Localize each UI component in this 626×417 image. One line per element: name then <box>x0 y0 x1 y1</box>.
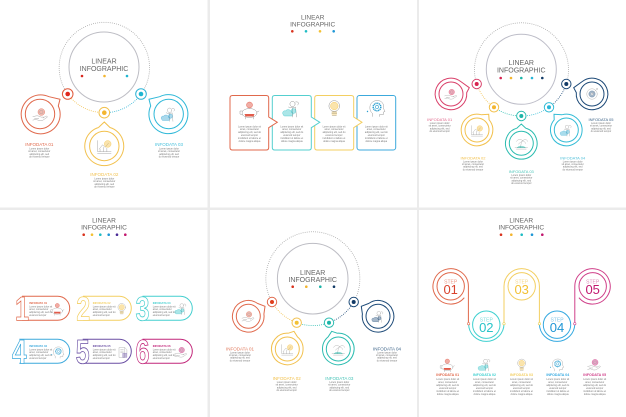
label 2: sit amet, consectetur <box>276 384 298 387</box>
label 2: adipiscing elit, sed <box>277 386 297 389</box>
pill 5 <box>76 333 131 371</box>
title: INFOGRAPHIC <box>80 66 128 73</box>
box 4: incididunt ut labore et <box>365 137 388 140</box>
label 1 <box>427 117 453 133</box>
pill 4: amet, consectetur <box>29 351 49 354</box>
column 2: incididunt ut labore et <box>473 390 496 393</box>
step 1 <box>433 269 468 324</box>
step 3: 03 <box>514 282 529 297</box>
pill 4: INFODATA 04 <box>29 344 48 348</box>
label 3: do eiusmod tempor <box>329 389 350 392</box>
box 4 <box>357 96 396 150</box>
label 3 <box>155 142 184 159</box>
column 4: adipiscing elit, sed do <box>546 384 570 387</box>
central circle <box>277 243 348 314</box>
column 1: eiusmod tempor <box>439 387 456 390</box>
box 3: incididunt ut labore et <box>323 137 346 140</box>
pill 5: amet, consectetur <box>93 351 112 354</box>
panel: four arrow boxes <box>210 0 417 208</box>
column 2 <box>473 359 497 396</box>
dotted connectors <box>272 302 354 326</box>
box 1: adipiscing elit, sed do <box>238 131 262 134</box>
label 5: adipiscing elit, sed <box>591 127 611 130</box>
title: LINEAR <box>92 218 116 225</box>
column 1 <box>436 359 460 396</box>
column 1: INFODATA 01 <box>436 373 459 377</box>
node 4 <box>349 297 358 307</box>
step 2 <box>469 311 504 341</box>
column 5: amet, consectetur <box>585 381 604 384</box>
label 3: Lorem ipsum dolor <box>159 147 179 150</box>
box 2: dolore magna aliqua <box>281 140 303 143</box>
box 4: eiusmod tempor <box>368 134 385 137</box>
label 1: Lorem ipsum dolor <box>430 122 450 125</box>
label 2 <box>273 376 301 392</box>
label 2: INFODATA 02 <box>461 155 486 160</box>
dotted ring <box>59 22 150 94</box>
step 2: 02 <box>479 320 494 335</box>
label 4 <box>373 346 402 362</box>
title colour dots <box>500 233 544 236</box>
label 1: do eiusmod tempor <box>230 359 250 362</box>
pill 2: 2 <box>76 290 90 328</box>
label 5: Lorem ipsum dolor <box>591 122 611 125</box>
node 5 <box>562 79 571 89</box>
title: INFOGRAPHIC <box>288 277 337 284</box>
label 2: Lorem ipsum dolor <box>463 160 483 163</box>
label 2: sit amet, consectetur <box>93 180 116 183</box>
label 2 <box>90 172 119 189</box>
label 1: sit amet, consectetur <box>28 150 51 153</box>
pill 1: 1 <box>15 290 29 328</box>
column 5: dolore magna aliqua <box>584 393 606 396</box>
column 4: INFODATA 04 <box>546 373 569 377</box>
node 3 <box>324 318 334 327</box>
label 2: Lorem ipsum dolor <box>94 177 114 180</box>
label 4: Lorem ipsum dolor <box>563 160 583 163</box>
pill 1 <box>15 290 70 328</box>
callout 2 <box>85 122 124 166</box>
pill 2: amet, consectetur <box>93 308 112 311</box>
box 2: incididunt ut labore et <box>280 137 303 140</box>
label 1: INFODATA 01 <box>226 346 255 351</box>
pill 4 <box>12 333 70 371</box>
label 2: sit amet, consectetur <box>462 163 484 166</box>
callout 3 <box>323 331 354 365</box>
title: LINEAR <box>301 14 324 21</box>
step 3: STEP <box>515 279 529 285</box>
dotted ring <box>474 23 568 84</box>
label 3: sit amet, consectetur <box>158 150 180 153</box>
box 3: amet, consectetur <box>324 128 344 131</box>
column 1: dolore magna aliqua <box>437 393 459 396</box>
node 2 <box>99 107 110 118</box>
pill 2: INFODATA 02 <box>93 301 111 305</box>
pill 1: adipiscing elit, sed do <box>29 311 53 314</box>
label 2: do eiusmod tempor <box>276 389 297 392</box>
callout 3 <box>149 95 188 134</box>
title: LINEAR <box>300 270 325 277</box>
label 2: adipiscing elit, sed <box>95 183 115 186</box>
panel: four-step circular infographic <box>210 210 417 417</box>
label 4: INFODATA 04 <box>560 155 586 160</box>
column 5: Lorem ipsum dolor sit <box>583 378 606 381</box>
box 2 <box>272 96 320 150</box>
step 1: 01 <box>443 282 458 297</box>
pill 2: Lorem ipsum dolor sit <box>93 305 116 308</box>
title: INFOGRAPHIC <box>290 21 336 28</box>
pill 1: amet, consectetur <box>29 308 49 311</box>
box 2: Lorem ipsum dolor sit <box>280 125 303 128</box>
pill 4: 4 <box>12 333 27 371</box>
label 2: INFODATA 02 <box>273 376 301 381</box>
label 1: sit amet, consectetur <box>229 354 251 357</box>
panel: five-step circular infographic <box>419 0 626 208</box>
box 1: incididunt ut labore et <box>238 137 261 140</box>
central circle <box>69 32 139 102</box>
label 1: do eiusmod tempor <box>29 156 50 159</box>
column 2: adipiscing elit, sed do <box>473 384 497 387</box>
column 3: adipiscing elit, sed do <box>510 384 534 387</box>
column 3: amet, consectetur <box>512 381 531 384</box>
label 1: Lorem ipsum dolor <box>230 351 250 354</box>
label 3 <box>325 376 354 392</box>
title: LINEAR <box>91 58 117 66</box>
label 3: do eiusmod tempor <box>159 156 179 159</box>
callout 3 <box>505 124 537 159</box>
dotted connectors <box>68 94 141 113</box>
box 1: eiusmod tempor <box>241 134 258 137</box>
column 2: dolore magna aliqua <box>474 393 496 396</box>
pill 3: adipiscing elit, sed do <box>153 311 176 314</box>
box 1 <box>230 96 277 150</box>
label 3: INFODATA 03 <box>325 376 354 381</box>
column 4: incididunt ut labore et <box>546 390 569 393</box>
step 5: STEP <box>586 279 600 285</box>
column 1: adipiscing elit, sed do <box>436 384 460 387</box>
step 5: 05 <box>585 282 600 297</box>
box 1: dolore magna aliqua <box>239 140 261 143</box>
column 3 <box>510 359 534 396</box>
label 3: INFODATA 03 <box>509 169 535 174</box>
pill 6: INFODATA 06 <box>153 344 171 348</box>
dotted connectors <box>477 84 566 116</box>
title: INFOGRAPHIC <box>81 225 127 232</box>
callout 4 <box>551 114 582 146</box>
label 2: INFODATA 02 <box>90 172 119 177</box>
label 1 <box>25 142 54 159</box>
title colour dots <box>81 75 128 77</box>
label 4: do eiusmod tempor <box>562 168 583 171</box>
label 5: sit amet, consectetur <box>590 125 612 128</box>
label 3: Lorem ipsum dolor <box>329 381 349 384</box>
label 1: do eiusmod tempor <box>429 130 450 133</box>
label 3: adipiscing elit, sed <box>330 386 350 389</box>
column 4: dolore magna aliqua <box>547 393 569 396</box>
pill 6: Lorem ipsum dolor sit <box>153 348 176 351</box>
box 2: amet, consectetur <box>282 128 301 131</box>
pill 4: adipiscing elit, sed do <box>29 354 53 357</box>
pill 3: amet, consectetur <box>153 308 172 311</box>
callout 2 <box>461 114 493 146</box>
column 5: INFODATA 05 <box>583 373 606 377</box>
title: INFOGRAPHIC <box>497 68 546 74</box>
pill 1: Lorem ipsum dolor sit <box>29 305 52 308</box>
column 3: eiusmod tempor <box>513 387 530 390</box>
column 3: incididunt ut labore et <box>510 390 533 393</box>
step 4: STEP <box>550 317 564 323</box>
pill 2: adipiscing elit, sed do <box>93 311 116 314</box>
label 4: Lorem ipsum dolor <box>377 351 397 354</box>
label 2 <box>461 155 486 171</box>
pill 5: 5 <box>76 333 90 371</box>
node 1 <box>267 297 277 307</box>
node 1 <box>472 79 481 89</box>
label 5: INFODATA 05 <box>589 117 614 122</box>
label 2: adipiscing elit, sed <box>463 166 483 169</box>
label 3: INFODATA 03 <box>155 142 184 147</box>
box 2: eiusmod tempor <box>283 134 301 137</box>
dotted ring <box>266 232 360 302</box>
column 2: Lorem ipsum dolor sit <box>473 378 496 381</box>
label 5: do eiusmod tempor <box>591 130 611 133</box>
title: LINEAR <box>509 60 534 67</box>
node 1 <box>62 89 73 99</box>
box 3: dolore magna aliqua <box>323 140 345 143</box>
column 5: eiusmod tempor <box>586 387 603 390</box>
step 3 <box>504 269 539 324</box>
label 3: sit amet, consectetur <box>510 177 533 180</box>
pill 6 <box>136 333 192 371</box>
label 2: Lorem ipsum dolor <box>277 381 297 384</box>
title colour dots <box>291 30 335 33</box>
column 4: Lorem ipsum dolor sit <box>546 378 569 381</box>
pill 1: eiusmod tempor <box>29 314 47 317</box>
label 3: adipiscing elit, sed <box>512 179 532 182</box>
pill 2: eiusmod tempor <box>93 314 110 317</box>
pill 1: INFODATA 01 <box>29 301 48 305</box>
title colour dots <box>499 77 544 79</box>
label 4: adipiscing elit, sed <box>563 166 583 169</box>
label 2: do eiusmod tempor <box>94 186 115 189</box>
column 2: INFODATA 02 <box>473 373 496 377</box>
column 1: incididunt ut labore et <box>436 390 459 393</box>
pill 5: eiusmod tempor <box>93 357 110 360</box>
title: LINEAR <box>509 218 533 225</box>
step 2: STEP <box>480 317 493 323</box>
node 2 <box>489 103 499 112</box>
pill 6: 6 <box>136 333 149 371</box>
box 4: amet, consectetur <box>367 128 386 131</box>
column 2: amet, consectetur <box>475 381 494 384</box>
panel: six numbered pills <box>0 210 208 417</box>
label 4: do eiusmod tempor <box>377 359 397 362</box>
column 3: Lorem ipsum dolor sit <box>510 378 533 381</box>
box 3: adipiscing elit, sed do <box>323 131 346 134</box>
label 3: sit amet, consectetur <box>328 384 351 387</box>
label 3: adipiscing elit, sed <box>159 153 179 156</box>
callout 2 <box>271 331 303 365</box>
column 3: dolore magna aliqua <box>511 393 533 396</box>
label 1: sit amet, consectetur <box>429 125 451 128</box>
box 3 <box>315 96 362 150</box>
column 4: eiusmod tempor <box>549 387 567 390</box>
pill 3 <box>136 290 192 328</box>
label 4: sit amet, consectetur <box>376 354 398 357</box>
step 4 <box>539 311 575 341</box>
label 5 <box>589 117 614 133</box>
label 3 <box>509 169 535 185</box>
box 1: Lorem ipsum dolor sit <box>238 125 261 128</box>
pill 4: Lorem ipsum dolor sit <box>29 348 52 351</box>
label 1: INFODATA 01 <box>25 142 54 147</box>
pill 3: 3 <box>136 290 149 328</box>
label 4: INFODATA 04 <box>373 346 402 351</box>
box 4: dolore magna aliqua <box>365 140 388 143</box>
column 4: amet, consectetur <box>548 381 567 384</box>
pill 6: eiusmod tempor <box>153 357 170 360</box>
node 3 <box>136 89 146 99</box>
callout 1 <box>435 78 469 110</box>
label 3: do eiusmod tempor <box>511 182 532 185</box>
node 3 <box>517 111 526 121</box>
node 4 <box>544 103 554 112</box>
pill 3: eiusmod tempor <box>153 314 170 317</box>
box 3: eiusmod tempor <box>325 134 343 137</box>
box 2: adipiscing elit, sed do <box>280 131 304 134</box>
label 4 <box>560 155 586 171</box>
pill 5: Lorem ipsum dolor sit <box>93 348 116 351</box>
callout 4 <box>361 300 394 332</box>
pill 3: INFODATA 03 <box>153 301 171 305</box>
column 4 <box>546 359 570 396</box>
callout 1 <box>21 95 60 134</box>
label 1: adipiscing elit, sed <box>230 357 250 360</box>
title: INFOGRAPHIC <box>498 225 544 232</box>
label 4: adipiscing elit, sed <box>377 357 397 360</box>
title colour dots <box>291 285 335 288</box>
pill 6: amet, consectetur <box>153 351 172 354</box>
label 4: sit amet, consectetur <box>562 163 584 166</box>
pill 6: adipiscing elit, sed do <box>153 354 176 357</box>
box 1: amet, consectetur <box>240 128 259 131</box>
panel: five-step winding path <box>419 210 626 417</box>
junction markers <box>467 322 576 325</box>
label 1: Lorem ipsum dolor <box>29 147 49 150</box>
box 4: adipiscing elit, sed do <box>365 131 388 134</box>
pill 3: Lorem ipsum dolor sit <box>153 305 176 308</box>
callout 5 <box>574 78 608 110</box>
box 4: Lorem ipsum dolor sit <box>365 125 388 128</box>
step 4: 04 <box>550 320 564 335</box>
panel: three-step circular infographic <box>0 0 208 208</box>
column 3: INFODATA 03 <box>510 373 533 377</box>
central circle <box>486 34 556 104</box>
callout 1 <box>232 300 265 332</box>
column 5: adipiscing elit, sed do <box>583 384 607 387</box>
step 1: STEP <box>444 279 458 285</box>
label 1: INFODATA 01 <box>427 117 453 122</box>
title colour dots <box>82 233 127 236</box>
column 5: incididunt ut labore et <box>583 390 606 393</box>
column 1: Lorem ipsum dolor sit <box>436 378 459 381</box>
label 1: adipiscing elit, sed <box>430 127 450 130</box>
column 5 <box>583 359 607 396</box>
label 1 <box>226 346 255 362</box>
label 2: do eiusmod tempor <box>463 168 483 171</box>
step 5 <box>575 269 610 324</box>
column 2: eiusmod tempor <box>476 387 493 390</box>
label 3: Lorem ipsum dolor <box>511 174 531 177</box>
column 1: amet, consectetur <box>438 381 457 384</box>
box 3: Lorem ipsum dolor sit <box>323 125 345 128</box>
pill 4: eiusmod tempor <box>29 357 47 360</box>
pill 5: adipiscing elit, sed do <box>93 354 116 357</box>
pill 2 <box>76 290 131 328</box>
label 1: adipiscing elit, sed <box>30 153 50 156</box>
node 2 <box>292 318 301 327</box>
pill 5: INFODATA 05 <box>93 344 111 348</box>
